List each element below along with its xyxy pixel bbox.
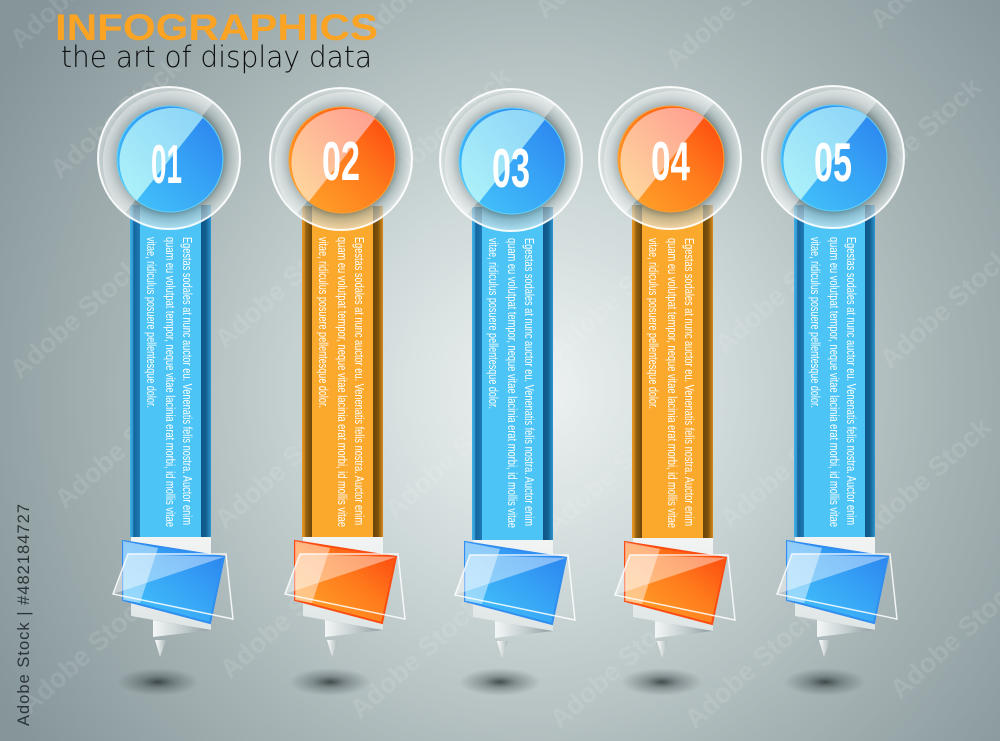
floor shadow 2 (289, 668, 371, 696)
watermark pattern: Adobe Stock (379, 391, 522, 524)
badge 3 (440, 89, 582, 231)
number 03: 03 (492, 137, 530, 199)
glass card 1 (113, 541, 233, 623)
column 4 (599, 87, 741, 696)
number 04: 04 (651, 130, 690, 192)
floor shadow 1 (117, 668, 199, 696)
badge 5 (762, 86, 904, 228)
ribbon 5 text: Egestas sodales at nunc auctor eu. Venenatis felis nostra. Auctor enim (844, 237, 859, 525)
glass card 3 (455, 542, 575, 624)
floor shadow 3 (459, 668, 541, 696)
ribbon 5 text: vitae, ridiculus posuere pellentesque dolor. (808, 237, 823, 408)
number 05: 05 (814, 131, 852, 193)
column 5 (762, 86, 904, 696)
ribbon 3 text: vitae, ridiculus posuere pellentesque dolor. (486, 238, 501, 409)
paper fold and pin 5 (795, 537, 875, 657)
ribbon 1 text: vitae, ridiculus posuere pellentesque dolor. (144, 237, 159, 408)
ribbon 2 text: quam eu volutpat tempor, neque vitae lacinia erat morbi, id mollis vitae (335, 237, 350, 527)
floor shadow 4 (621, 668, 703, 696)
ribbon 4 text: vitae, ridiculus posuere pellentesque dolor. (646, 238, 661, 409)
watermark pattern: Adobe Stock (709, 226, 852, 359)
subtitle: the art of display data (61, 40, 372, 74)
watermark pattern: Adobe Stock (344, 591, 487, 724)
watermark pattern: Adobe Stock (679, 601, 822, 734)
ribbon 3 text: Egestas sodales at nunc auctor eu. Venenatis felis nostra. Auctor enim (522, 238, 537, 526)
paper fold and pin 2 (303, 537, 383, 657)
badge 4 (599, 87, 741, 229)
watermark pattern: Adobe Stock (714, 401, 857, 534)
paper fold and pin 3 (473, 540, 553, 658)
ribbon 4 text: quam eu volutpat tempor, neque vitae lacinia erat morbi, id mollis vitae (665, 238, 680, 528)
ribbon 5 text (808, 237, 859, 527)
ribbon 2 text (316, 237, 367, 527)
watermark pattern: Adobe Stock (539, 406, 682, 539)
glass card 2 (285, 541, 405, 623)
ribbon 5 (794, 205, 875, 537)
watermark pattern: Adobe Stock (4, 251, 147, 384)
ribbon 5 text: quam eu volutpat tempor, neque vitae lacinia erat morbi, id mollis vitae (827, 237, 842, 527)
ribbon 4 text (646, 238, 697, 528)
watermark pattern: Adobe Stock (14, 586, 157, 719)
watermark pattern: Adobe Stock (844, 71, 987, 204)
glass card 4 (615, 542, 735, 624)
paper fold and pin 1 (131, 537, 211, 657)
watermark pattern: Adobe Stock (854, 411, 997, 544)
ribbon 3 (472, 207, 553, 540)
badge 1 (98, 87, 240, 229)
column 1 (98, 87, 240, 696)
watermark pattern: Adobe Stock (544, 601, 687, 734)
watermark pattern: Adobe Stock (49, 381, 192, 514)
number 02: 02 (322, 130, 360, 192)
watermark pattern: Adobe Stock (214, 551, 357, 684)
column 2 (270, 88, 412, 696)
ribbon 1 (130, 205, 211, 537)
column 3 (440, 89, 582, 696)
ribbon 2 (302, 206, 383, 537)
watermark pattern: Adobe Stock (544, 231, 687, 364)
paper fold and pin 4 (633, 538, 713, 658)
watermark pattern: Adobe Stock (209, 401, 352, 534)
ribbon 3 text (486, 238, 537, 528)
glass card 5 (777, 541, 897, 623)
ribbon 4 text: Egestas sodales at nunc auctor eu. Venenatis felis nostra. Auctor enim (682, 238, 697, 526)
watermark pattern: Adobe Stock (374, 61, 517, 194)
ribbon 4 (632, 205, 713, 538)
ribbon 1 text (144, 237, 195, 527)
floor shadow 5 (784, 668, 866, 696)
ribbon 3 text: quam eu volutpat tempor, neque vitae lacinia erat morbi, id mollis vitae (505, 238, 520, 528)
watermark pattern: Adobe Stock (209, 221, 352, 354)
watermark pattern: Adobe Stock (44, 51, 187, 184)
ribbon 1 text: Egestas sodales at nunc auctor eu. Venenatis felis nostra. Auctor enim (180, 237, 195, 525)
ribbon 1 text: quam eu volutpat tempor, neque vitae lacinia erat morbi, id mollis vitae (163, 237, 178, 527)
ribbon 2 text: Egestas sodales at nunc auctor eu. Venenatis felis nostra. Auctor enim (352, 237, 367, 525)
stock credit: Adobe Stock | #482184727 (15, 504, 33, 726)
ribbon 2 text: vitae, ridiculus posuere pellentesque dolor. (316, 237, 331, 408)
number 01: 01 (151, 133, 182, 195)
badge 2 (270, 88, 412, 230)
title: INFOGRAPHICS (55, 7, 378, 48)
